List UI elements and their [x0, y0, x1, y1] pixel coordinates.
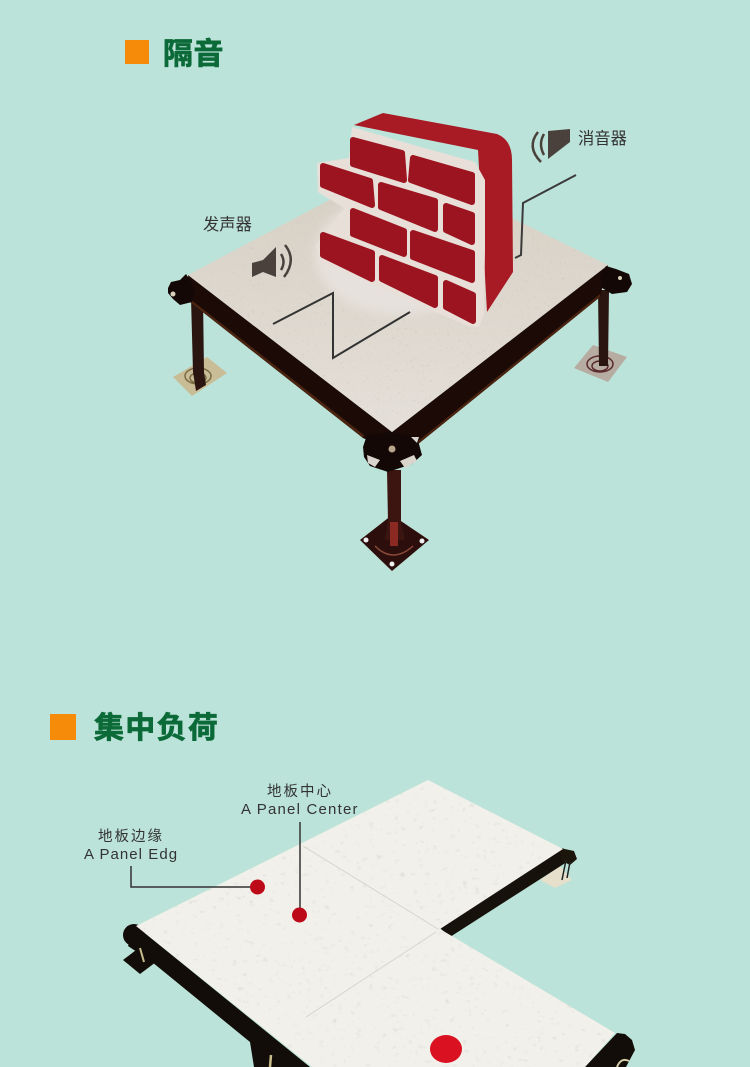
heading text: 集中负荷 — [94, 712, 219, 745]
load point: center — [292, 908, 307, 922]
floor beams — [188, 265, 608, 449]
leader line: center — [299, 822, 301, 910]
illustration: raised floor panel with brick wall — [168, 113, 632, 571]
label: panel center — [241, 782, 359, 818]
reduced sound line — [515, 175, 576, 258]
illustration: floor panels with load points — [84, 775, 635, 1067]
label: panel edge — [84, 827, 178, 863]
heading: concentrated load — [50, 712, 219, 745]
label: panel center: 地板中心 — [267, 782, 333, 800]
icon: emitter speaker — [252, 245, 291, 277]
load point: corner area — [430, 1035, 462, 1063]
floor speckle — [210, 223, 586, 430]
icon: orange square — [50, 714, 76, 740]
panel seams — [303, 846, 438, 1017]
brick wall — [316, 113, 513, 327]
label: emitter: 发声器 — [203, 216, 252, 234]
leader line: edge — [131, 866, 251, 887]
label: silencer: 消音器 — [578, 130, 627, 148]
surface texture — [146, 788, 605, 1066]
floor surface — [136, 780, 615, 1067]
load point: edge — [250, 880, 265, 894]
pedestal heads — [168, 266, 632, 472]
icon: silencer speaker — [533, 129, 570, 162]
bricks — [323, 140, 473, 321]
wall mortar face — [316, 127, 485, 327]
icon: orange square — [125, 40, 149, 64]
label: panel center: A Panel Center — [241, 801, 359, 818]
label: panel edge: 地板边缘 — [98, 827, 164, 845]
zigzag sound line — [273, 293, 410, 358]
beams and pedestals — [123, 848, 635, 1067]
floor panel surface — [188, 163, 608, 432]
heading text: 隔音 — [163, 38, 224, 71]
wall side — [354, 113, 513, 312]
label: panel edge: A Panel Edg — [84, 846, 178, 863]
light halo around wall — [314, 210, 428, 316]
support posts and feet — [173, 290, 627, 571]
heading: soundproofing — [125, 38, 224, 71]
